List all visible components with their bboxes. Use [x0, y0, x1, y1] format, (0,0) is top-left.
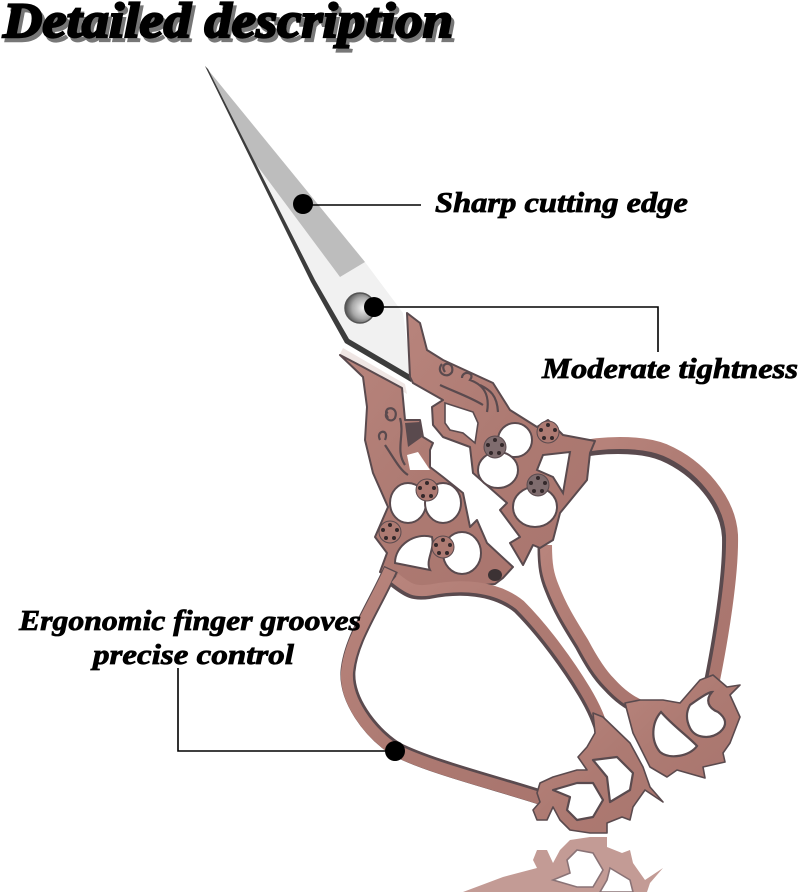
callout: ergonomic finger grooves: precise control: [90, 639, 295, 671]
right handle loop: [544, 443, 740, 778]
engraved swirl: [379, 408, 408, 475]
callout: sharp cutting edge: [293, 187, 688, 219]
callout: moderate tightness: Moderate tightness: [541, 353, 798, 385]
engraved swirl: [440, 364, 498, 412]
callout: ergonomic finger grooves: Ergonomic finger grooves: [18, 605, 361, 637]
open cut-out under upper band: [445, 403, 478, 443]
left ornate handle body: [340, 355, 513, 590]
callout: ergonomic finger grooves: [18, 605, 405, 761]
blades: [205, 66, 412, 394]
pivot screw: [345, 293, 375, 323]
reflection of scissors handle: [463, 837, 663, 892]
flower ornaments: [379, 421, 559, 558]
callout: moderate tightness: [364, 297, 798, 385]
right ornate handle body: [407, 313, 595, 565]
lower handle loop: [347, 569, 663, 833]
scissors illustration: [205, 66, 740, 892]
flower dots: [381, 423, 557, 555]
callout: sharp cutting edge: Sharp cutting edge: [435, 187, 688, 219]
